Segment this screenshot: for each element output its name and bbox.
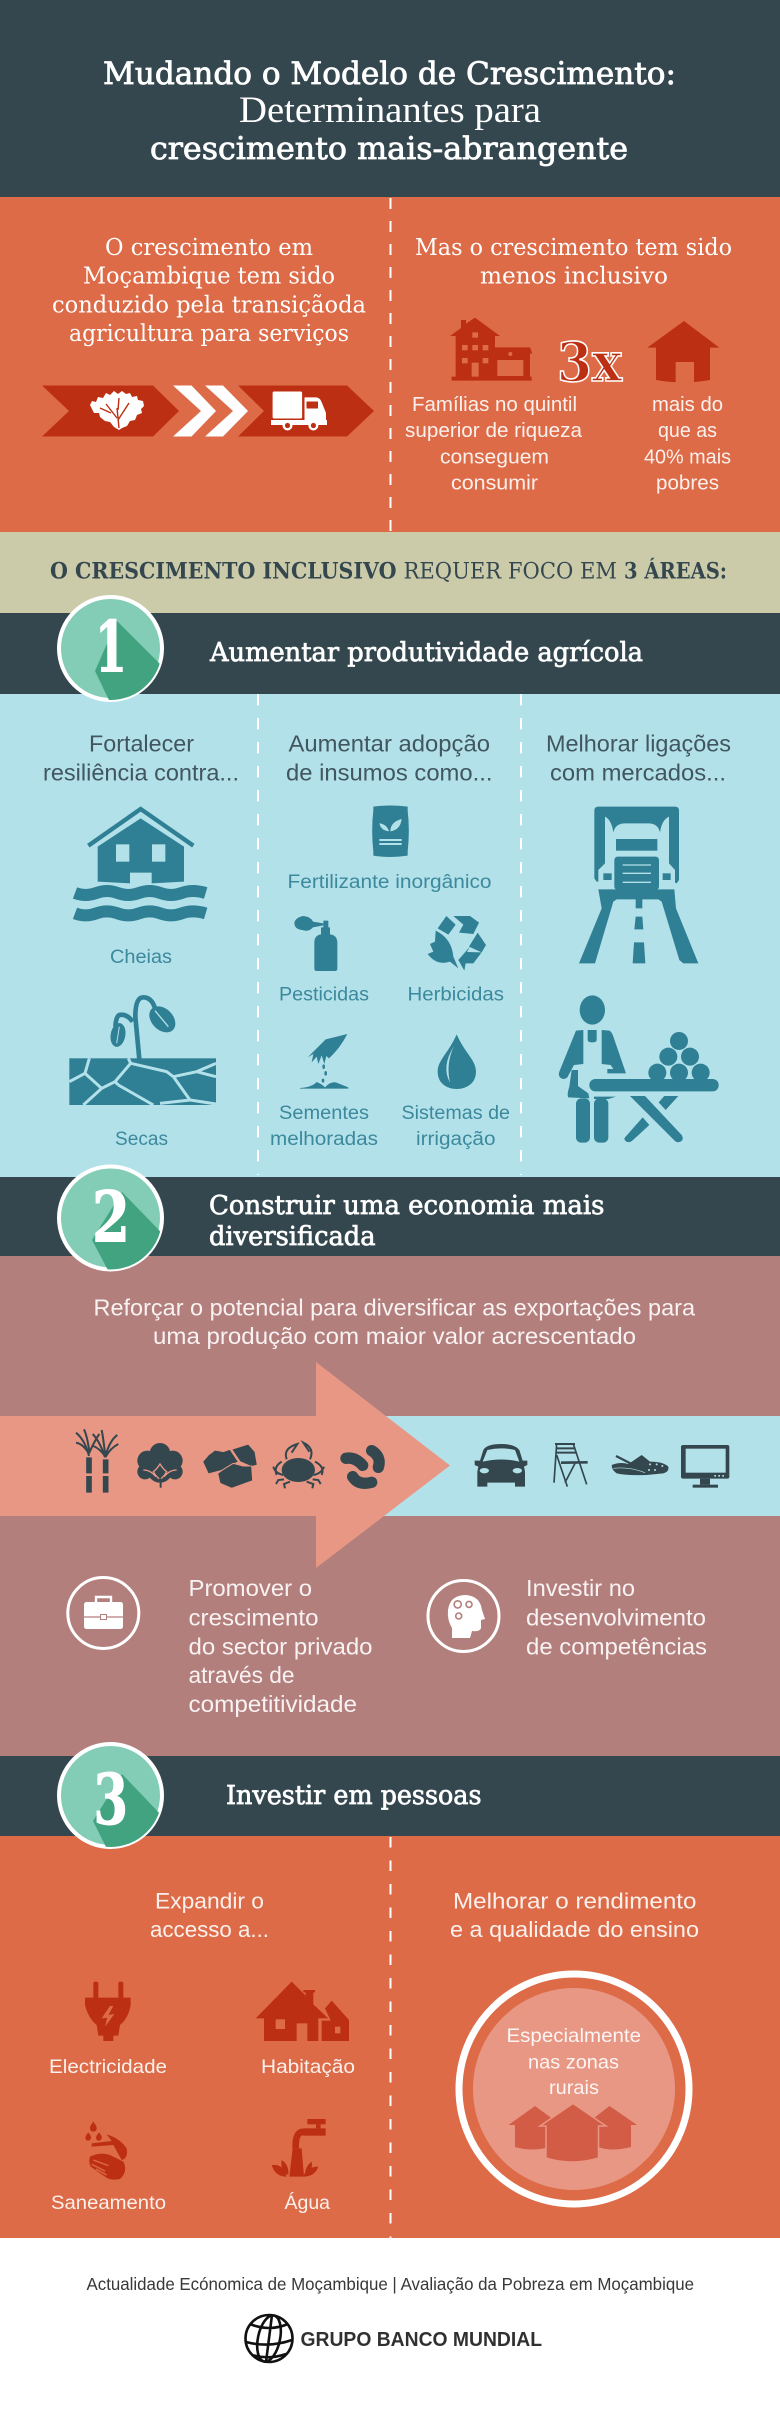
label: water: Água [284,2191,330,2214]
text: column 1 heading [43,730,239,786]
text: especially rural: Especialmente [506,2025,641,2047]
badge: number 1 [57,595,164,702]
text: growth driven by transition: conduzido pela transiçãoda [52,292,366,318]
banner: three focus areas: O CRESCIMENTO INCLUSIVO [50,558,396,584]
text: growth driven by transition: agricultura para serviços [69,321,349,347]
icon: drought plant and cracked soil [69,997,216,1105]
icon: crab [273,1443,324,1488]
text: 3x multiplier: 3x [557,330,623,394]
label: sanitation: Saneamento [51,2192,166,2214]
badge: number 3 [57,1742,164,1849]
label: floods: Cheias [110,947,172,968]
text: richest households [405,394,583,494]
text: expand access: accesso a... [150,1917,269,1942]
title [103,56,676,167]
icon: car [475,1444,527,1487]
icon: truck [271,392,327,430]
section 2: diversified economy [0,1166,780,1756]
label: fertilizer: Fertilizante inorgânico [288,872,492,893]
text: growth less inclusive: menos inclusivo [480,264,668,290]
text: column 3 heading: Melhorar ligações [546,730,731,756]
icon: flooded house [75,809,206,915]
heading: section 1: Aumentar produtividade agrícola [209,638,643,668]
icon: computer monitor [681,1445,729,1488]
text: especially rural: nas zonas [528,2052,619,2074]
badge: number 3: 3 [94,1758,128,1841]
section 3: invest in people [0,1744,780,2238]
text: poorest households: que as [658,420,717,442]
text: expand access [150,1888,269,1942]
label: irrigation systems: irrigação [416,1129,496,1150]
text: poorest households: pobres [656,472,719,494]
callout: rural zones [459,1974,689,2204]
heading: section 2: diversificada [209,1222,376,1252]
text: column 2 heading: de insumos como... [286,760,492,786]
label: herbicides: Herbicidas [408,984,504,1006]
icon: lettuce [90,391,144,430]
text: private sector: através de [188,1662,294,1688]
text: growth less inclusive [415,235,732,290]
section 1: agricultural productivity [0,597,780,1177]
icon: pesticide spray [294,916,337,971]
text: logo wordmark: GRUPO BANCO MUNDIAL [300,2329,542,2351]
icon: briefcase in circle [68,1578,139,1648]
text: richest households: consumir [451,472,538,494]
text: private sector: competitividade [188,1691,357,1717]
title: Mudando o Modelo de Crescimento: [103,56,676,92]
label: improved seeds: Sementes [279,1103,369,1124]
text: source: Actualidade Ecónomica de Moçambique | Avaliação da Pobreza em Moçambique [86,2274,694,2294]
label: irrigation systems: Sistemas de [402,1103,510,1124]
label: improved seeds [270,1103,378,1150]
text: richest households: Famílias no quintil [412,394,577,416]
label: droughts: Secas [115,1129,168,1150]
icon: fertilizer bag [372,805,409,857]
text: richest households: conseguem [440,446,549,468]
banner: three focus areas: REQUER FOCO EM [404,560,617,584]
icon: market vendor [559,995,719,1143]
text: private sector: do sector privado [188,1634,372,1660]
icon: electric plug [85,1982,131,2041]
label: housing: Habitação [261,2056,355,2078]
text: column 3 heading [546,730,731,786]
text: poorest households [644,394,731,494]
text: export diversification [94,1294,695,1349]
label: irrigation systems [402,1103,510,1150]
label: improved seeds: melhoradas [270,1129,378,1150]
header panel [0,0,780,197]
arrow: diversification [0,1362,450,1568]
title: crescimento mais-abrangente [150,131,628,167]
text: growth less inclusive: Mas o crescimento tem sido [415,235,732,261]
badge: number 2: 2 [92,1176,130,1258]
icon: houses [256,1982,349,2041]
text: private sector [188,1575,372,1717]
text: export diversification: Reforçar o potencial para diversificar as exportações para [94,1294,695,1320]
icon: sugar cane [76,1429,118,1493]
heading: section 2 [209,1191,604,1252]
band: higher value exports [0,1416,780,1516]
badge: number 1: 1 [95,606,127,688]
badge: number 2 [57,1164,164,1272]
text: growth driven by transition [52,235,366,347]
icon: truck on road [579,807,698,963]
heading: section 2: Construir uma economia mais [209,1191,604,1221]
icon: hand washing [85,2122,127,2180]
label: electricity: Electricidade [49,2056,167,2078]
icon: head with gears in circle [428,1580,499,1652]
text: teaching quality [450,1888,699,1942]
text: especially rural [506,2025,641,2099]
icon: cotton [137,1443,183,1488]
text: growth driven by transition: Moçambique tem sido [83,264,335,290]
heading: section 3: Investir em pessoas [226,1781,482,1811]
text: poorest households: 40% mais [644,446,731,468]
icon: water tap [272,2119,326,2177]
text: column 2 heading: Aumentar adopção [288,730,490,756]
label: pesticides: Pesticidas [279,984,369,1006]
icon: beans [346,1451,379,1483]
text: private sector: Promover o [188,1575,312,1601]
icon: hand sowing seeds [300,1034,348,1089]
text: skills: desenvolvimento [526,1604,706,1630]
text: skills [526,1575,707,1660]
icon: rocks [203,1444,257,1488]
icon: hut [647,321,719,384]
icon: clog shoe [612,1455,668,1475]
icon: folding chair [554,1444,588,1487]
panel: growth context [0,197,780,532]
banner: three focus areas [0,532,780,613]
icon: globe logo [246,2313,292,2364]
title: Determinantes para [239,90,541,131]
text: growth driven by transition: O crescimento em [105,235,313,261]
banner: three focus areas: 3 ÁREAS: [624,558,727,584]
text: poorest households: mais do [652,394,723,416]
text: skills: Investir no [526,1575,635,1601]
icon: water drop [438,1034,476,1089]
text: teaching quality: Melhorar o rendimento [453,1888,696,1914]
arrow: agriculture to services [42,386,374,436]
text: richest households: superior de riqueza [405,420,583,442]
text: column 1 heading: resiliência contra... [43,760,239,786]
footer [86,2274,694,2364]
icon: mansion [450,318,532,381]
text: column 2 heading [286,730,492,786]
text: expand access: Expandir o [155,1888,264,1914]
text: teaching quality: e a qualidade do ensino [450,1917,699,1942]
icon: rural huts [508,2104,637,2162]
text: skills: de competências [526,1634,707,1660]
text: column 3 heading: com mercados... [550,760,726,786]
text: export diversification: uma produção com maior valor acrescentado [153,1323,636,1349]
text: column 1 heading: Fortalecer [89,730,194,756]
icon: recycle leaf [428,916,486,971]
text: private sector: crescimento [188,1604,318,1630]
text: especially rural: rurais [549,2077,599,2099]
